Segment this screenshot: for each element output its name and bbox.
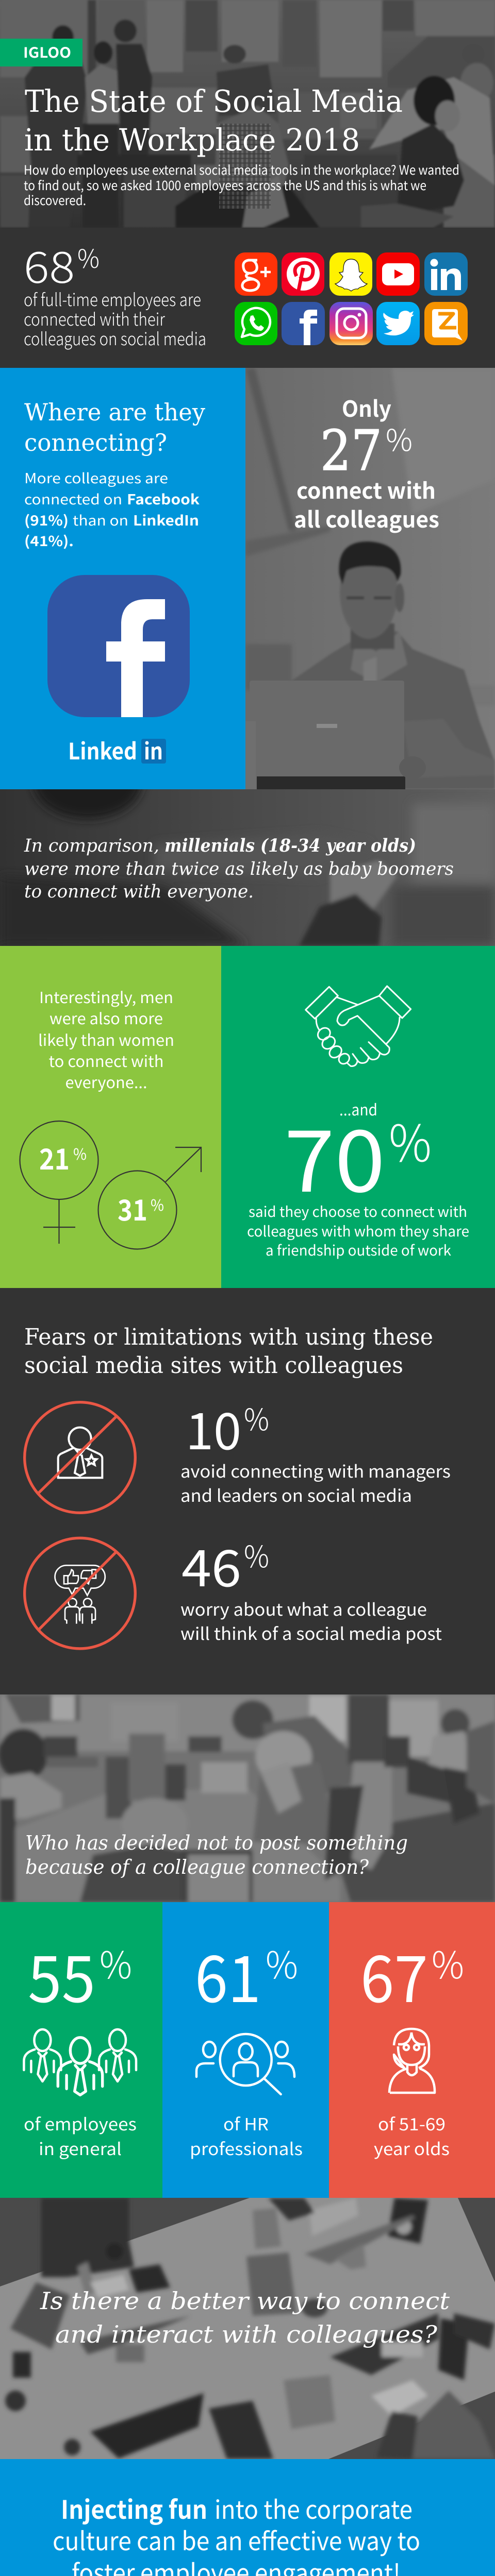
stat description: colleagues on social media (24, 325, 206, 350)
lead statement: culture can be an effective way to (53, 2521, 420, 2558)
open office photo (0, 1694, 495, 1902)
stat 27%: % (386, 416, 412, 460)
lead statement: into the corporate (214, 2490, 412, 2527)
millennials statement: to connect with everyone. (24, 882, 254, 902)
intro text: discovered. (24, 191, 86, 209)
icon: twitter (376, 302, 420, 345)
stat 46 description: will think of a social media post (180, 1620, 442, 1645)
icon: linkedin wordmark: Linked (68, 733, 137, 766)
hero office photo (0, 0, 495, 228)
blurred phone photo (0, 747, 495, 946)
stat description: said they choose to connect with (249, 1201, 467, 1222)
stat description (24, 286, 206, 350)
intro text: to find out, so we asked 1000 employees across the US and this is what we (24, 176, 426, 194)
icon: handshake (306, 986, 411, 1066)
millennials statement: were more than twice as likely as baby boomers (24, 859, 454, 879)
icon: male symbol 31%: 31 (118, 1188, 147, 1229)
panel: digital workplace solutions (0, 2459, 495, 2576)
panel: better way question (0, 2198, 495, 2459)
stat 46 description: worry about what a colleague (180, 1596, 427, 1621)
stat description: connected with their (24, 306, 166, 331)
intro text: How do employees use external social media tools in the workplace? We wanted (24, 160, 459, 179)
icon: instagram (329, 302, 373, 345)
heading (24, 1324, 433, 1379)
heading (24, 398, 205, 456)
overhead desk photo (0, 2198, 495, 2459)
icon: facebook (282, 302, 325, 345)
icon: no social judgement (25, 1538, 135, 1649)
panel: employees in general 55 percent (0, 1902, 162, 2198)
title: The State of Social Media (25, 83, 403, 119)
intro text (24, 160, 459, 209)
stat 10 description: and leaders on social media (180, 1482, 412, 1507)
description: of HR (223, 2111, 269, 2136)
heading: Fears or limitations with using these (24, 1324, 433, 1350)
body text: than on (73, 510, 128, 530)
description: of employees (24, 2111, 137, 2136)
body text (24, 467, 200, 550)
stat 70%: 70 (284, 1092, 385, 1216)
stat description: a friendship outside of work (266, 1240, 452, 1260)
icon: no manager (25, 1402, 135, 1513)
icon: male symbol 31%: % (151, 1193, 164, 1215)
section question: Is there a better way to connect (40, 2287, 450, 2315)
and label: ...and (339, 1097, 377, 1120)
icon: zoho chat (424, 302, 468, 345)
description: in general (39, 2136, 122, 2160)
intro text: to connect with (48, 1049, 164, 1072)
panel: millennials band (3, 789, 495, 946)
heading: connecting? (24, 429, 167, 456)
icon: older woman with glasses (389, 2029, 435, 2093)
description (190, 2111, 303, 2160)
description: of 51-69 (378, 2111, 446, 2136)
stat description: of full-time employees are (24, 286, 201, 311)
stat 27%: 27 (320, 419, 382, 483)
stat 46%: % (244, 1533, 269, 1576)
body text: More colleagues are (24, 467, 168, 487)
section question: and interact with colleagues? (55, 2320, 437, 2348)
body text: Facebook (127, 488, 200, 509)
man with laptop photo (245, 368, 495, 789)
millennials statement (24, 835, 454, 902)
icon: google plus (235, 252, 277, 296)
body text: LinkedIn (133, 510, 199, 530)
stat 67% (360, 1927, 464, 2021)
stat 55%: % (100, 1935, 132, 1989)
heading: social media sites with colleagues (24, 1352, 403, 1379)
igloo logo badge (0, 39, 82, 66)
stat 46 description (180, 1596, 442, 1645)
stat 10%: 10 (186, 1391, 241, 1464)
stat 61%: 61 (195, 1927, 261, 2021)
icon: linkedin (424, 252, 468, 296)
connect with all colleagues text: all colleagues (294, 502, 439, 534)
intro text: Interestingly, men (39, 985, 173, 1008)
icon: linkedin wordmark: in (144, 733, 163, 766)
icon: male symbol 31% (98, 1147, 201, 1249)
stat 46%: 46 (182, 1528, 241, 1601)
stat 68%: % (77, 239, 100, 276)
icon: snapchat (329, 252, 372, 296)
icon: social media grid (235, 252, 468, 345)
only text: Only (342, 392, 391, 423)
heading: Where are they (24, 398, 205, 426)
connect with all colleagues text: connect with (296, 473, 436, 505)
panel: 27 percent photo (245, 368, 495, 789)
section question: Who has decided not to post something (25, 1832, 408, 1854)
panel: fears or limitations (23, 1324, 451, 1650)
body text: (41%). (24, 530, 74, 550)
icon: female symbol 21%: 21 (39, 1137, 70, 1178)
stat 61% (195, 1927, 298, 2021)
description (374, 2111, 450, 2160)
stat 10%: % (244, 1396, 269, 1439)
description: professionals (190, 2136, 303, 2160)
stat description (247, 1201, 469, 1260)
description (24, 2111, 137, 2160)
connect with all colleagues text (294, 473, 439, 534)
stat 55%: 55 (28, 1927, 95, 2021)
section question: because of a colleague connection? (25, 1856, 369, 1878)
panel: friendship 70 percent (221, 946, 495, 1288)
lead statement: Injecting fun (61, 2490, 207, 2527)
icon: female symbol 21%: % (73, 1142, 87, 1164)
section question (25, 1832, 408, 1878)
stat 70%: % (389, 1103, 432, 1176)
icon: female symbol 21% (20, 1121, 98, 1244)
stat 70% (284, 1092, 432, 1216)
stat 68%: 68 (24, 233, 75, 296)
stat 67%: 67 (360, 1927, 428, 2021)
millennials statement: millenials (18-34 year olds) (164, 835, 416, 856)
intro text: were also more (50, 1006, 163, 1029)
panel: 51 to 69 year olds 67 percent (329, 1902, 495, 2198)
panel: men versus women (0, 946, 221, 1288)
igloo logo badge: IGLOO (23, 42, 71, 62)
stat 67%: % (432, 1935, 464, 1989)
icon: facebook large (47, 575, 190, 717)
body text: connected on (24, 488, 122, 509)
millennials statement: In comparison, (24, 836, 159, 856)
icon: pinterest (282, 252, 324, 296)
description: year olds (374, 2136, 450, 2160)
stat 68% (24, 233, 100, 296)
title: in the Workplace 2018 (24, 122, 360, 158)
panel: hero (0, 0, 495, 228)
panel: who decided not to post (0, 1694, 495, 1902)
section question (40, 2287, 450, 2348)
panel: where are they connecting (0, 368, 245, 789)
panel: 68 percent stat (24, 233, 468, 350)
icon: whatsapp (235, 302, 277, 345)
lead statement (53, 2490, 420, 2576)
stat 55% (28, 1927, 132, 2021)
stat description: colleagues with whom they share (247, 1221, 469, 1241)
intro text: likely than women (38, 1028, 174, 1050)
stat 10% (186, 1391, 269, 1464)
stat 10 description (180, 1458, 451, 1507)
intro text: everyone... (65, 1070, 147, 1093)
stat 46% (182, 1528, 269, 1601)
icon: employees group (24, 2029, 136, 2095)
stat 61%: % (266, 1935, 298, 1989)
icon: youtube (376, 252, 420, 296)
panel: HR professionals 61 percent (162, 1902, 329, 2198)
body text: (91%) (24, 510, 69, 530)
stat 10 description: avoid connecting with managers (180, 1458, 451, 1483)
icon: magnifier over people (196, 2034, 294, 2094)
title (24, 83, 403, 158)
intro text (38, 985, 174, 1093)
